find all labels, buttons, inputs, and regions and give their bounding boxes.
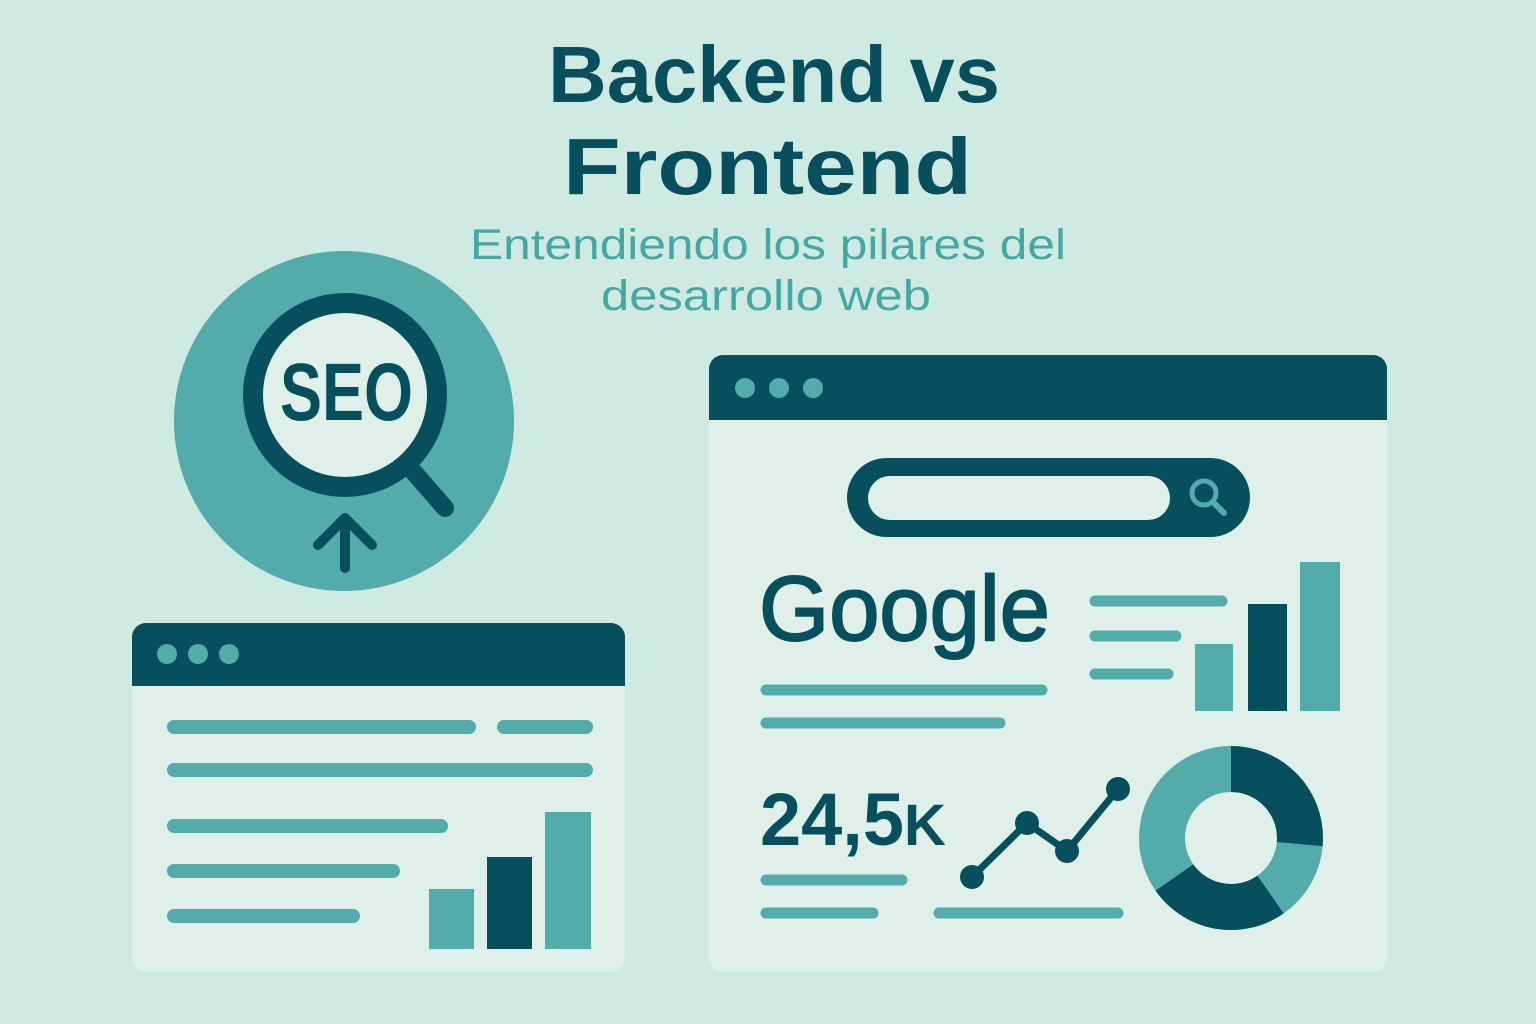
stat number: 24,5K bbox=[760, 778, 946, 861]
icon: up arrow bbox=[318, 518, 372, 568]
donut chart bbox=[1162, 769, 1300, 907]
panel: left browser bbox=[132, 623, 625, 972]
search bar bbox=[847, 458, 1250, 537]
bar chart left bbox=[429, 812, 591, 949]
icon: magnifier: SEO bbox=[280, 347, 413, 438]
panel: right browser bbox=[709, 355, 1387, 972]
icon: magnifier bbox=[253, 303, 445, 508]
title: Frontend bbox=[563, 122, 972, 211]
text lines right bbox=[766, 601, 1222, 913]
subtitle: Entendiendo los pilares del bbox=[470, 221, 1066, 269]
text lines bbox=[174, 727, 586, 916]
icon: SEO circle bbox=[174, 251, 514, 591]
Google wordmark: Google bbox=[759, 558, 1050, 660]
title bbox=[548, 30, 1000, 211]
title: Backend vs bbox=[548, 30, 1000, 119]
line chart bbox=[960, 777, 1130, 889]
subtitle: desarrollo web bbox=[601, 272, 931, 320]
subtitle bbox=[470, 221, 1066, 320]
bar chart right bbox=[1195, 562, 1340, 711]
